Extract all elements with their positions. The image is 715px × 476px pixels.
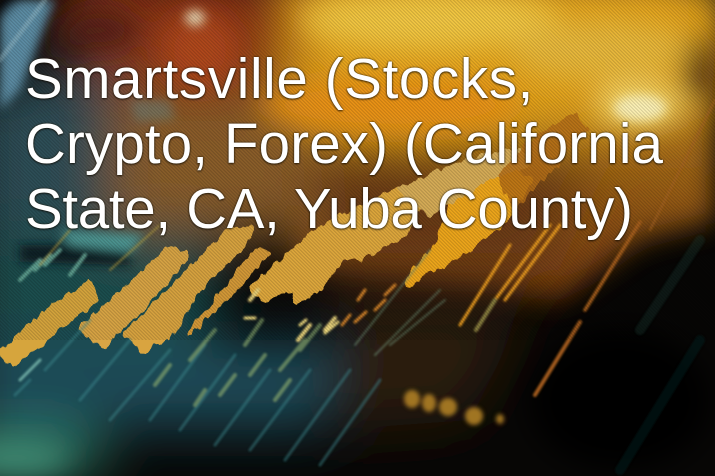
title: State, CA, Yuba County) [25, 177, 633, 240]
title: Crypto, Forex) (California [25, 112, 663, 175]
title: Smartsville (Stocks, [25, 47, 534, 110]
base warm field on the right [270, 0, 715, 300]
chart bars: yellow price bands [0, 115, 585, 363]
texture [0, 0, 715, 340]
title [25, 47, 664, 242]
bokeh row [404, 390, 504, 425]
